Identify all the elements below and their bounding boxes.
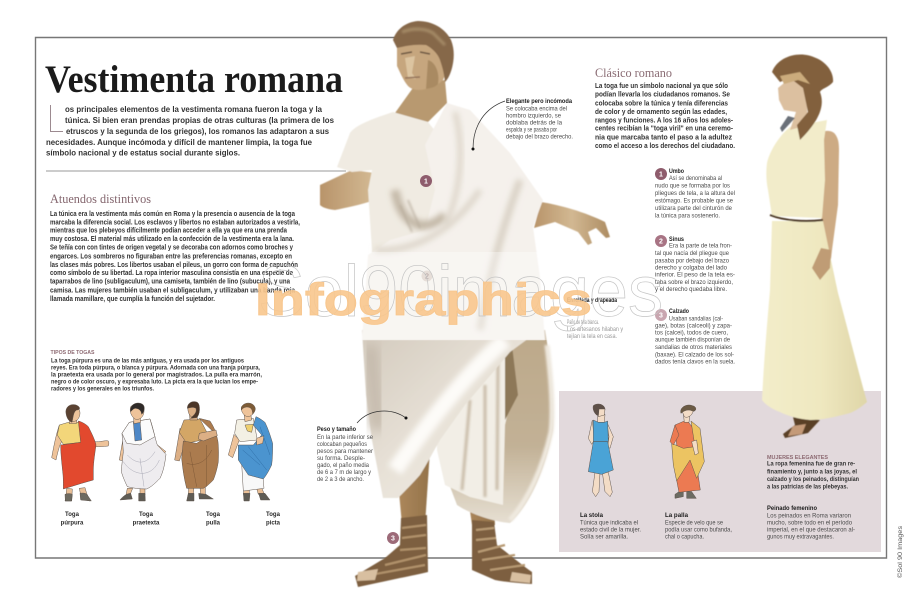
toga labels: Toga — [139, 512, 154, 518]
body text: atuendos distintivos: mientras que los plebeyos difícilmente podían acceder a ella ya que era una prenda — [50, 228, 287, 235]
skirt — [762, 221, 867, 420]
item 1: umbo: Así se denominaba al — [669, 176, 722, 182]
la palla text — [665, 513, 732, 540]
body text: atuendos distintivos: las clases más pobres. Los libertos usaban el pileus, un gorro con forma de capuchón — [50, 262, 298, 269]
tunic — [337, 112, 450, 340]
mujeres elegantes text: La ropa femenina fue de gran re- — [767, 460, 855, 468]
figure: la palla — [670, 405, 704, 498]
callout: note under watermark: Paño de tela blanca. — [567, 320, 599, 326]
watermark light band — [360, 252, 555, 340]
body text: atuendos distintivos — [50, 211, 300, 303]
toga labels: picta — [266, 520, 281, 526]
bodice — [766, 120, 827, 218]
toga labels — [61, 512, 281, 526]
item 3: calzado: aunque también disponían de — [655, 338, 731, 344]
divider under intro — [46, 170, 346, 172]
item 1: umbo: 1 — [659, 172, 663, 178]
item 2: sinus: derecho y colgaba del lado — [655, 266, 728, 272]
intro text block: necesidades. Aunque incómoda y difícil de mantener limpia, la toga fue — [46, 137, 312, 147]
shawl tip — [780, 116, 795, 132]
toga labels: Toga — [266, 512, 281, 518]
panel: tipos de togas text: radores y los generales en los triunfos. — [51, 385, 154, 392]
callout: peso y tamano: En la parte inferior se — [317, 435, 374, 441]
panel: tipos de togas text: TIPOS DE TOGAS — [50, 350, 95, 356]
panel: tipos de togas text — [50, 350, 262, 392]
la stola text: La stola — [580, 513, 604, 519]
toga upper body — [362, 103, 545, 340]
mujeres elegantes text: MUJERES ELEGANTES — [767, 455, 828, 461]
item 2: sinus: pasaba por debajo del brazo — [655, 258, 730, 264]
figure: la stola — [588, 404, 613, 497]
figure: toga purpura — [52, 405, 109, 501]
belt — [770, 215, 823, 221]
la stola text — [580, 513, 641, 540]
toga folds — [375, 112, 520, 330]
marker 1: 1 — [424, 178, 428, 186]
item 3: calzado — [655, 309, 735, 366]
right leg and sandal — [467, 490, 532, 584]
text: clasico romano: rangos y funciones. A los 16 años los adoles- — [595, 117, 734, 124]
figure: toga praetexta — [119, 403, 166, 501]
body text: atuendos distintivos: muy costosa. El material más utilizado en la confección de la vestimenta era la lana. — [50, 236, 294, 243]
item 2: sinus: y el derecho quedaba libre. — [655, 287, 727, 293]
toga labels: Toga — [206, 512, 221, 518]
callout: elegante pero incomoda: doblaba detrás de la — [506, 120, 563, 126]
main toga drape — [362, 330, 540, 498]
watermark orange text: Infographics — [255, 274, 592, 325]
callout: note under watermark: Enrollada y drapeada — [567, 298, 618, 304]
callout: elegante pero incomoda: hombro izquierdo, se — [506, 114, 562, 120]
mujeres elegantes text: a las patricias de las plebeyas. — [767, 483, 848, 490]
item 3: calzado: (baxae). El calzado de los sol- — [655, 352, 734, 358]
body text: atuendos distintivos: como símbolo de su libertad. La ropa interior masculina consistía en una especie de — [50, 270, 293, 277]
peinado femenino text: mucho, sobre todo en el período — [767, 520, 853, 526]
item 2: sinus: Sinus — [669, 237, 685, 243]
peinado femenino text: imperial, en el que destacaron al- — [767, 528, 855, 534]
intro text block — [46, 104, 334, 158]
sandal — [783, 417, 820, 438]
item 2: sinus: 2 — [659, 238, 663, 246]
text: clasico romano: como el acceso a los derechos del ciudadano. — [595, 143, 735, 150]
peinado femenino text: Peinado femenino — [767, 506, 817, 512]
callout: elegante pero incomoda: Se colocaba encima del — [506, 106, 567, 112]
back drape — [440, 330, 553, 523]
body text: atuendos distintivos: engarces. Los sombreros no figuraban entre las preferencias romanas, excepto en — [50, 253, 292, 260]
item 3: calzado: dados tenía clavos en la suela. — [655, 360, 735, 366]
callout: peso y tamano: gado, el paño media — [317, 463, 370, 469]
left arm — [320, 137, 423, 210]
watermark outline text: Sol90images — [258, 252, 663, 332]
peinado femenino text — [767, 506, 855, 540]
item 1: umbo — [655, 168, 735, 220]
hair — [772, 54, 833, 140]
intro text block: símbolo nacional y de estatus social durante siglos. — [46, 148, 240, 158]
item 2: sinus: Era la parte de tela fron- — [669, 244, 732, 250]
callout: elegante pero incomoda: espalda y se pasaba por — [506, 128, 557, 134]
la stola text: Túnica que indicaba el — [580, 520, 638, 526]
heading: atuendos distintivos: Atuendos distintivos — [50, 191, 151, 206]
mujeres elegantes text: calzado y los peinados, distinguían — [767, 476, 859, 483]
la stola text: estado civil de la mujer. — [580, 528, 641, 534]
right arm — [534, 202, 610, 245]
drop cap L — [50, 105, 63, 132]
face and neck — [778, 78, 808, 130]
intro text block: etruscos y la segunda de los griegos), los romanos las adaptaron a sus — [66, 126, 329, 136]
panel: tipos de togas text: negro o de color oscuro, y expresaba luto. La picta era la que lucían los empe- — [51, 378, 258, 385]
copyright: ©Sol 90 Images — [897, 526, 904, 578]
item 2: sinus — [655, 235, 735, 293]
marker 2: 2 — [425, 274, 429, 280]
text: clasico romano: centes recibían la "toga viril" en una ceremo- — [595, 126, 734, 133]
la palla text: podía usar como bufanda, — [665, 528, 732, 534]
callout: elegante pero incomoda: Elegante pero incómoda — [506, 99, 573, 105]
panel: tipos de togas text: la praetexta era usada por lo general por magistrados. La pulla era marrón, — [51, 371, 262, 378]
neck — [395, 80, 447, 122]
text: clasico romano: podían llevarla los ciudadanos romanos. Se — [595, 92, 730, 99]
figure: toga picta — [228, 403, 273, 501]
callout: peso y tamano: pesos para mantener — [317, 449, 373, 455]
item 3: calzado: gae), botas (calceoli) y zapa- — [655, 324, 732, 330]
item 1: umbo: nudo que se formaba por los — [655, 184, 730, 190]
body text: atuendos distintivos: marcaba la diferencia social. Los esclavos y libertos no estaban autorizados a vestirla, — [50, 219, 300, 226]
text: clasico romano: colocaba sobre la túnica y tenía diferencias — [595, 100, 728, 107]
item 3: calzado: Calzado — [669, 309, 689, 315]
toga labels: praetexta — [133, 520, 160, 526]
body text: atuendos distintivos: La túnica era la vestimenta más común en Roma y la presencia o ausencia de la toga — [50, 211, 295, 218]
peinado femenino text: gunos muy extravagantes. — [767, 534, 834, 540]
callout: elegante pero incomoda: debajo del brazo derecho. — [506, 134, 573, 140]
woman figure — [762, 54, 867, 438]
text: clasico romano: La toga fue un símbolo nacional ya que sólo — [595, 83, 728, 90]
text: clasico romano: de color y de ornamento según las edades, — [595, 109, 727, 116]
callout: peso y tamano: de 2 a 3 de ancho. — [317, 477, 364, 483]
inner shadow and front pleats — [437, 340, 518, 505]
marker 3 — [387, 532, 399, 544]
toga labels: pulla — [206, 520, 221, 526]
marker 1 — [420, 175, 432, 187]
item 1: umbo: pliegues de tela, a la altura del — [655, 191, 735, 197]
la palla text: chal o capucha. — [665, 534, 704, 540]
intro text block: os principales elementos de la vestimenta romana fueron la toga y la — [65, 104, 322, 114]
peinado femenino text: Los peinados en Roma variaron — [767, 514, 851, 520]
left leg and sandal — [355, 450, 430, 587]
toga labels: púrpura — [61, 520, 84, 526]
callout: elegante pero incomoda — [472, 99, 573, 150]
mujeres elegantes text — [767, 455, 859, 490]
item 3: calzado: tos (calcei), todos de cuero, — [655, 330, 728, 336]
callout: note under watermark: Los artesanos hilaban y — [567, 327, 623, 333]
la stola text: Solía ser amarilla. — [580, 534, 628, 540]
callout: peso y tamano: colocaban pequeños — [317, 442, 367, 448]
text: clasico romano — [595, 83, 735, 150]
la palla text: Especie de velo que se — [665, 520, 724, 526]
callout: peso y tamano — [317, 411, 408, 483]
callout: note under watermark: tejían la tela en casa. — [567, 334, 617, 340]
panel: mujeres elegantes background — [559, 391, 881, 552]
body text: atuendos distintivos: camisa. Las mujeres también usaban el subligaculum, y utilizaban una banda roja — [50, 287, 295, 294]
panel: tipos de togas text: reyes. Era toda púrpura, o blanca y púrpura. Adornada con una franja púrpura, — [51, 364, 260, 371]
mujeres elegantes text: finamiento y, junto a las joyas, el — [767, 468, 857, 475]
marker 2 — [422, 270, 432, 282]
head — [393, 21, 454, 90]
callout: note under watermark — [567, 298, 623, 340]
item 3: calzado: sandalias de otros materiales — [655, 345, 732, 351]
callout: peso y tamano: de 6 a 7 m de largo y — [317, 470, 371, 476]
text: clasico romano: nia que marcaba tanto el paso a la adultez — [595, 134, 732, 141]
marker 3: 3 — [391, 536, 395, 542]
toga labels: Toga — [65, 512, 80, 518]
item 1: umbo: la túnica para sostenerlo. — [655, 214, 720, 220]
callout: peso y tamano: su forma. Desple- — [317, 456, 365, 462]
hand — [812, 248, 831, 280]
item 3: calzado: 3 — [659, 312, 663, 320]
la palla text: La palla — [665, 513, 689, 519]
item 2: sinus: inferior. El peso de la tela es- — [655, 272, 735, 278]
title: Vestimenta romana — [45, 58, 343, 101]
item 2: sinus: taba sobre el brazo izquierdo, — [655, 280, 733, 286]
main figure: man in toga — [320, 21, 610, 587]
body text: atuendos distintivos: taparrabos de lino (subligaculum), una camiseta, también de lino (subucula), y una — [50, 279, 290, 286]
right arm — [812, 131, 839, 280]
item 1: umbo: utilizara parte del cinturón de — [655, 206, 733, 212]
item 3: calzado: Usaban sandalias (cal- — [669, 316, 723, 322]
intro text block: túnica. Si bien eran prendas propias de otras culturas (la primera de los — [65, 115, 334, 125]
item 1: umbo: Umbo — [669, 169, 684, 175]
item 2: sinus: tal que nacía del pliegue que — [655, 251, 730, 257]
body text: atuendos distintivos: llamada mamillare, que cumplía la función del sujetador. — [50, 296, 215, 303]
callout: peso y tamano: Peso y tamaño — [317, 427, 356, 433]
heading: clasico romano: Clásico romano — [595, 65, 672, 80]
panel: tipos de togas text: La toga púrpura es una de las más antiguas, y era usada por los antiguos — [51, 357, 244, 364]
figure: toga pulla — [175, 402, 219, 501]
item 1: umbo: estómago. Es probable que se — [655, 198, 734, 204]
body text: atuendos distintivos: Se teñía con con tintes de origen vegetal y se decoraba con adornos como broches y — [50, 245, 293, 252]
